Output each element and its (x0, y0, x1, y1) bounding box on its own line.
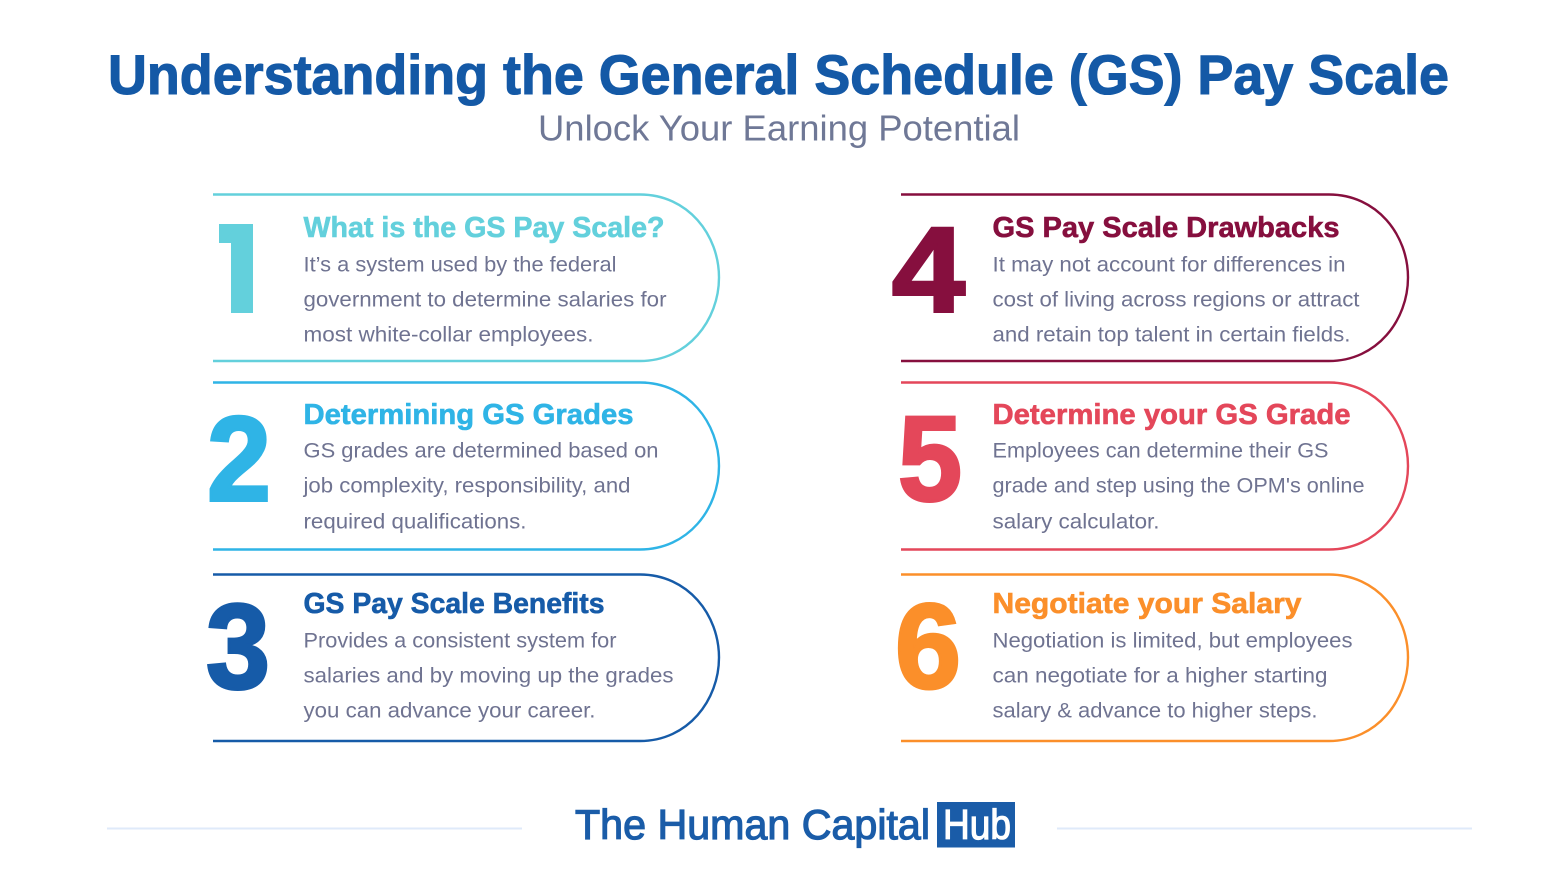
panel: 2 Determining GS Grades: Determining GS Grades (304, 399, 634, 431)
panel: 6 Negotiate your Salary: 6 (895, 578, 961, 714)
panel: 1 What is the GS Pay Scale (213, 194, 719, 361)
panel: 6 Negotiate your Salary: salary & advance to higher steps. (992, 700, 1318, 722)
panel: 6 Negotiate your Salary: Negotiate your Salary (992, 588, 1302, 620)
panel: 5 Determine your GS Grade: 5 (898, 390, 962, 526)
panel: 3 GS Pay Scale Benefits: 3 (206, 578, 270, 714)
panel: 1 What is the GS Pay Scale: It’s a system used by the federal (304, 254, 616, 276)
panel: 1 What is the GS Pay Scale: 1 (219, 202, 253, 338)
panel: 5 Determine your GS Grade: Employees can determine their GS (992, 440, 1328, 462)
panel: 1 What is the GS Pay Scale: most white-collar employees. (304, 324, 594, 346)
panel: 6 Negotiate your Salary (895, 574, 1408, 741)
panel: 4 GS Pay Scale Drawbacks (892, 194, 1408, 361)
panel: 5 Determine your GS Grade: salary calculator. (992, 510, 1160, 534)
subtitle: Unlock Your Earning Potential (538, 108, 1020, 148)
logo: The Human Capital Hub: Hub (943, 801, 1011, 848)
panel: 4 GS Pay Scale Drawbacks: It may not account for differences in (992, 254, 1346, 276)
panel: 1 What is the GS Pay Scale: What is the GS Pay Scale? (304, 212, 664, 244)
panel: 6 Negotiate your Salary: Negotiation is limited, but employees (992, 630, 1352, 652)
panel: 6 Negotiate your Salary: can negotiate for a higher starting (992, 664, 1328, 688)
panel: 2 Determining GS Grades: 2 (207, 390, 271, 526)
panel: 1 What is the GS Pay Scale: government to determine salaries for (304, 288, 667, 312)
panel: 2 Determining GS Grades: GS grades are determined based on (304, 440, 658, 462)
panel: 3 GS Pay Scale Benefits (206, 574, 719, 741)
panel: 3 GS Pay Scale Benefits: you can advance your career. (304, 700, 596, 722)
panel: 2 Determining GS Grades: job complexity, responsibility, and (302, 474, 630, 498)
panel: 2 Determining GS Grades (207, 382, 719, 550)
panel: 2 Determining GS Grades: required qualifications. (304, 510, 526, 534)
panel: 5 Determine your GS Grade (898, 382, 1408, 550)
panel: 5 Determine your GS Grade: grade and step using the OPM's online (992, 474, 1364, 498)
panel: 4 GS Pay Scale Drawbacks: 4 (892, 202, 965, 338)
title: Understanding the General Schedule (GS) Pay Scale (108, 43, 1449, 106)
panel: 3 GS Pay Scale Benefits: GS Pay Scale Benefits (304, 588, 604, 620)
panel: 4 GS Pay Scale Drawbacks: GS Pay Scale Drawbacks (992, 212, 1340, 244)
panel: 5 Determine your GS Grade: Determine your GS Grade (992, 399, 1350, 431)
panel: 4 GS Pay Scale Drawbacks: cost of living across regions or attract (992, 288, 1360, 312)
panel: 4 GS Pay Scale Drawbacks: and retain top talent in certain fields. (992, 324, 1350, 346)
panel: 3 GS Pay Scale Benefits: Provides a consistent system for (304, 630, 616, 652)
logo: The Human Capital Hub: The Human Capital (575, 801, 930, 848)
panel: 3 GS Pay Scale Benefits: salaries and by moving up the grades (304, 664, 674, 688)
